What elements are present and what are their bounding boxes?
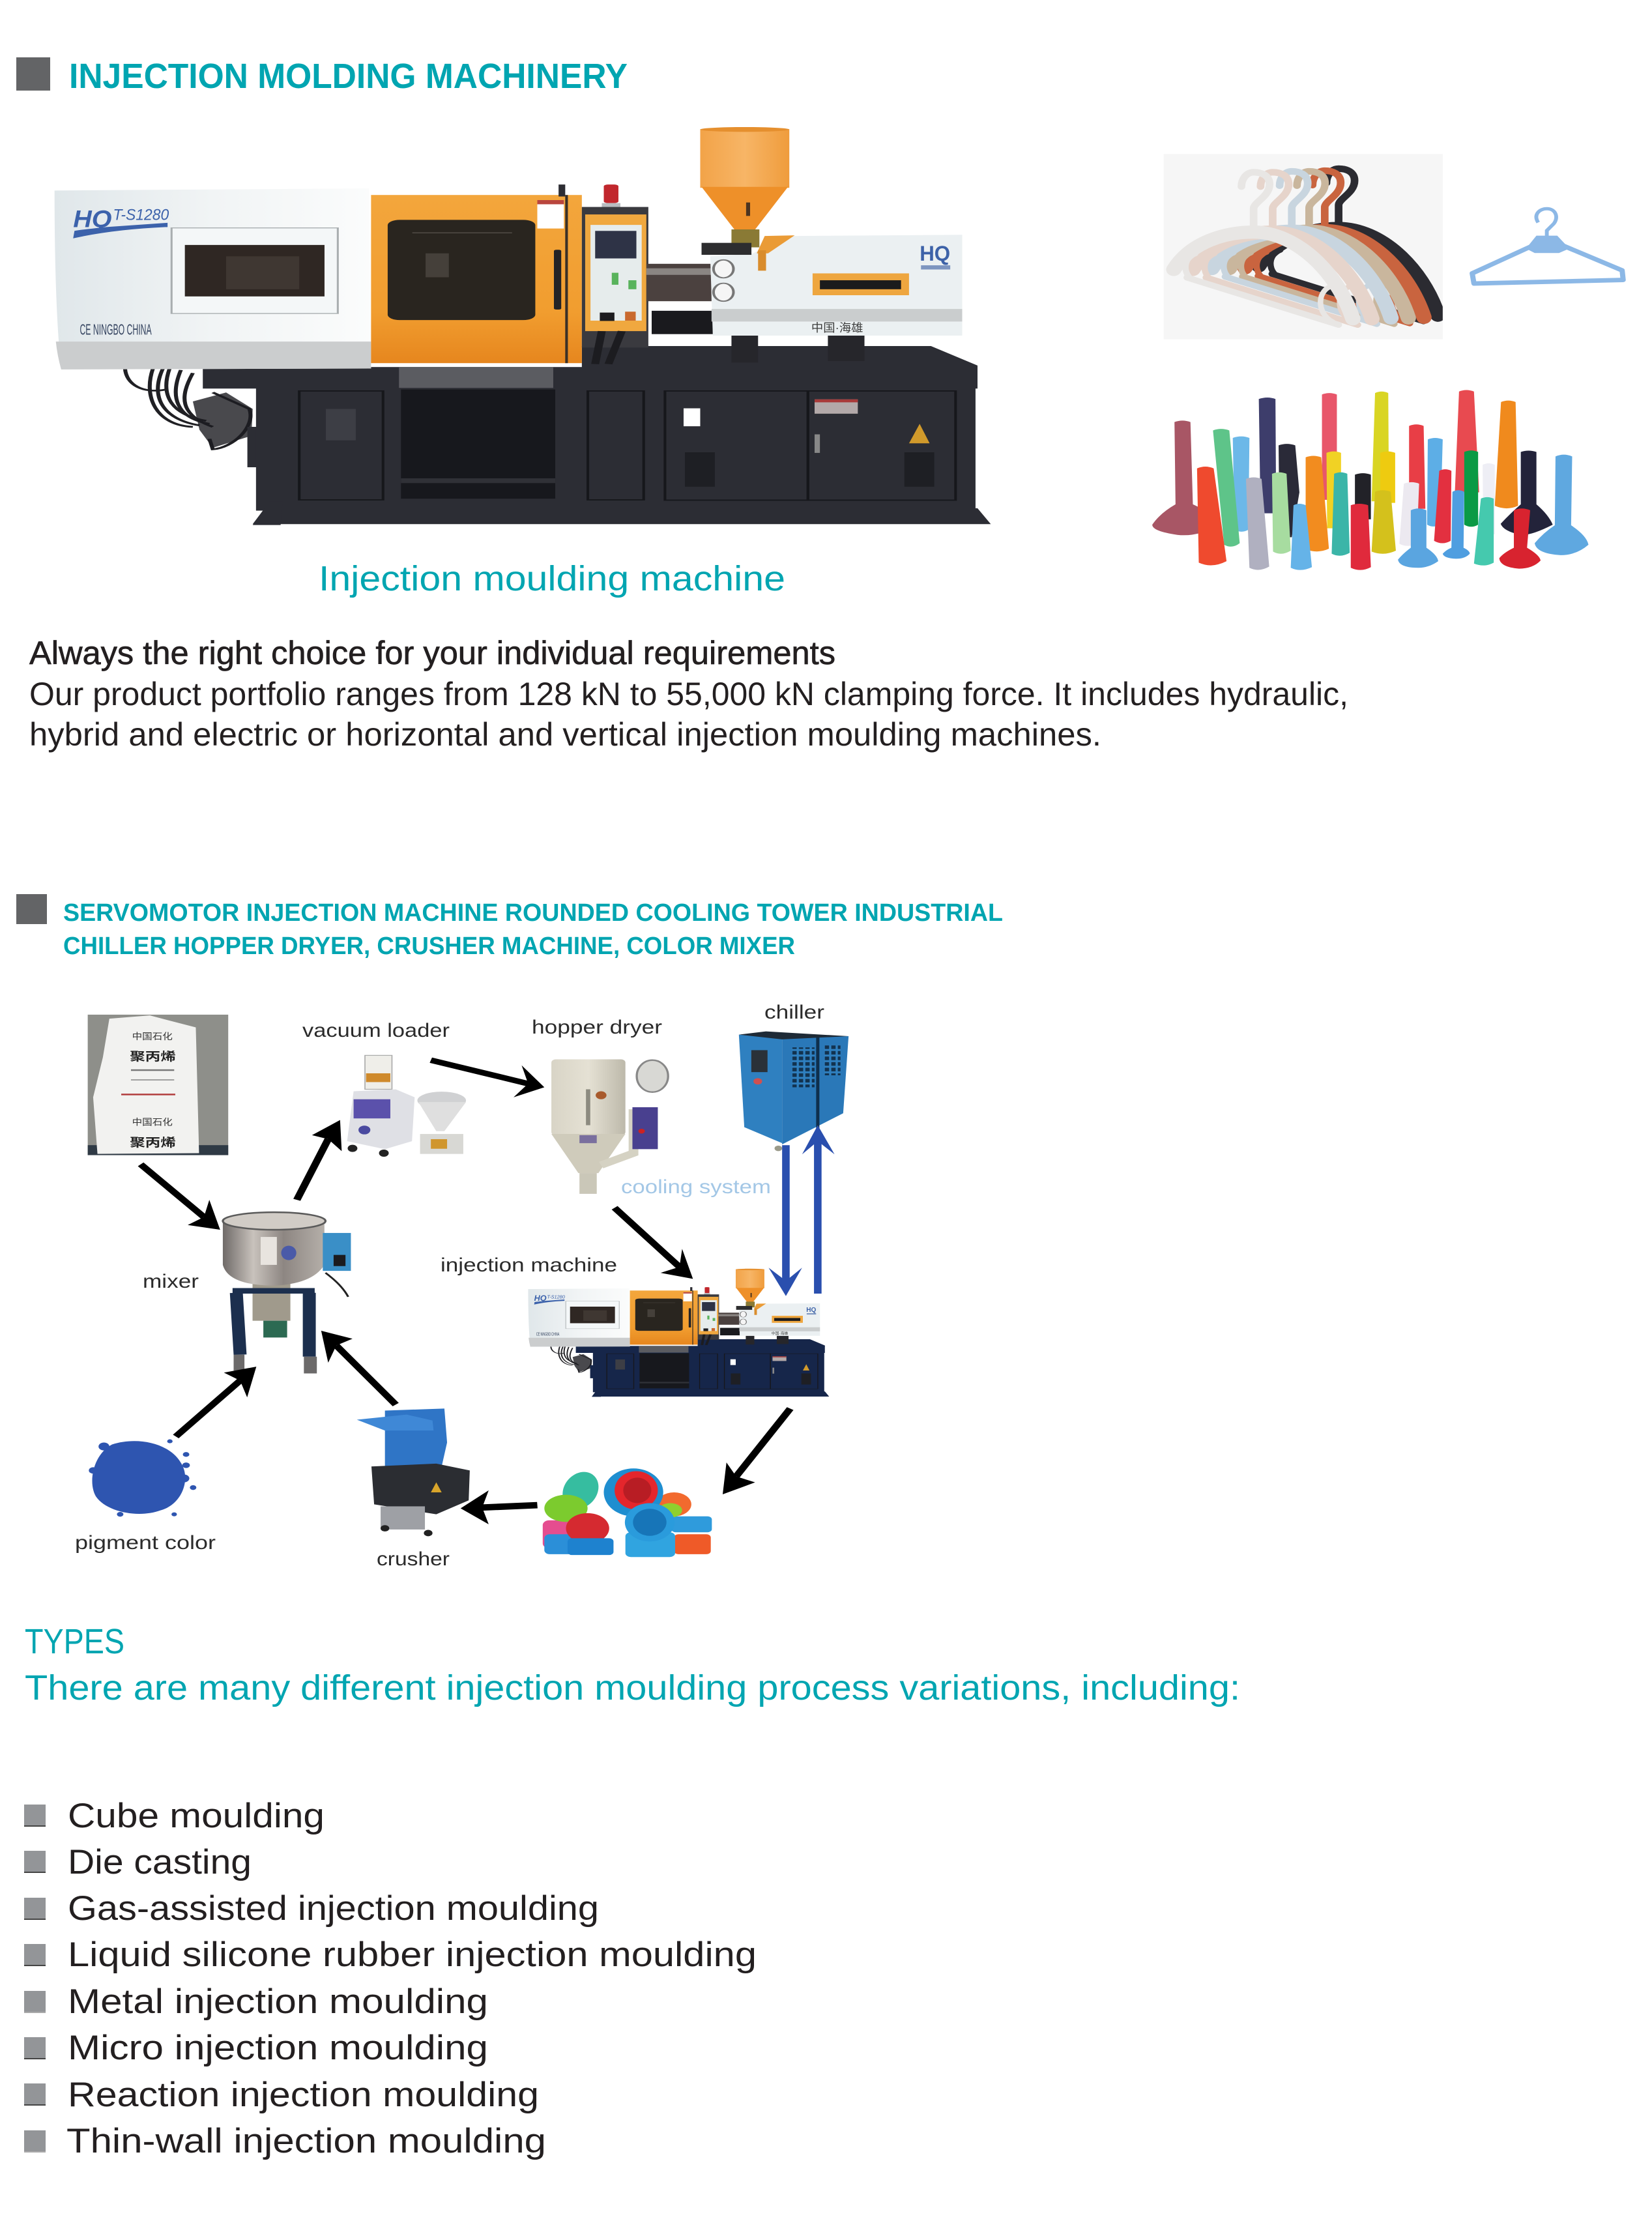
label: vacuum loader: vacuum loader [302,1020,450,1041]
arrow: hopper dryer to injection machine [615,1208,693,1279]
photo: raw material bag: 中国石化 [132,1032,173,1041]
cooling loop arrows [768,1125,835,1296]
title: injection molding machinery: INJECTION MOLDING MACHINERY [69,57,628,96]
lead sentence: Always the right choice for your individual requirements [29,635,835,671]
product photo: coloured plastic cones [1152,390,1589,570]
list: moulding types [24,1797,757,2160]
list item: liquid silicone rubber: Liquid silicone rubber injection moulding [68,1936,757,1974]
list item: gas-assisted: Gas-assisted injection moulding [68,1889,599,1928]
process flow diagram [75,1002,848,1570]
list item: cube moulding: Cube moulding [68,1797,325,1835]
illustration: injection moulding machine [55,127,991,525]
text block: portfolio description [29,635,1348,753]
small injection machine [528,1269,829,1397]
product photos: coloured hangers [1164,154,1443,339]
photo: coloured plastic caps [543,1468,712,1557]
photo: raw material bag [88,1015,228,1155]
photo: raw material bag: 中国石化 [132,1118,173,1127]
arrow: caps to crusher [461,1490,538,1524]
label: injection machine: injection machine [441,1255,617,1276]
heading marker square 2 [16,894,47,924]
photo: mixer [223,1212,351,1374]
label: chiller: chiller [764,1002,824,1023]
list item: reaction injection: Reaction injection moulding [68,2076,539,2114]
arrow: pigment to mixer [176,1367,256,1436]
photo: pigment colour powder [89,1440,196,1516]
diagram labels [75,1002,824,1570]
heading line 2: CHILLER HOPPER DRYER, CRUSHER MACHINE, COLOR MIXER [63,933,795,960]
photo: crusher [357,1408,470,1536]
photo: chiller [739,1032,848,1151]
photo: raw material bag: 聚丙烯 [130,1136,176,1150]
heading: types: TYPES [25,1622,124,1661]
label: hopper dryer: hopper dryer [532,1017,662,1038]
heading line 1: SERVOMOTOR INJECTION MACHINE ROUNDED COOLING TOWER INDUSTRIAL [63,899,1003,927]
heading: servomotor injection machine [63,899,1003,960]
label: crusher: crusher [377,1548,450,1570]
arrow: chiller down to machine [768,1145,802,1296]
body line 1: Our product portfolio ranges from 128 kN to 55,000 kN clamping force. It includes hydraulic, [29,676,1348,712]
arrow: crusher to mixer [321,1331,396,1404]
photo: vacuum loader [347,1055,466,1157]
intro: process variations: There are many different injection moulding process variations, including: [25,1668,1240,1707]
photo: raw material bag: 聚丙烯 [130,1050,176,1064]
label: pigment color: pigment color [75,1532,216,1554]
list item: metal injection: Metal injection moulding [68,1982,488,2021]
label: mixer: mixer [143,1271,199,1292]
arrow: mixer to vacuum loader [297,1120,341,1200]
heading marker square [16,57,50,91]
list item: micro injection: Micro injection moulding [68,2029,488,2067]
label: cooling system: cooling system [621,1176,771,1198]
arrow: machine up to chiller [802,1125,835,1294]
product photo: blue hanger [1472,209,1623,283]
body line 2: hybrid and electric or horizontal and vertical injection moulding machines. [29,716,1101,753]
list item: thin-wall injection: Thin-wall injection moulding [66,2122,546,2160]
caption: injection moulding machine: Injection moulding machine [319,559,785,598]
flow arrows [141,1060,790,1524]
arrow: bag to mixer [141,1165,220,1230]
list item: die casting: Die casting [68,1843,252,1881]
arrow: vacuum loader to hopper dryer [431,1060,544,1097]
arrow: injection machine to caps [723,1408,790,1494]
photo: hopper dryer [551,1060,668,1194]
